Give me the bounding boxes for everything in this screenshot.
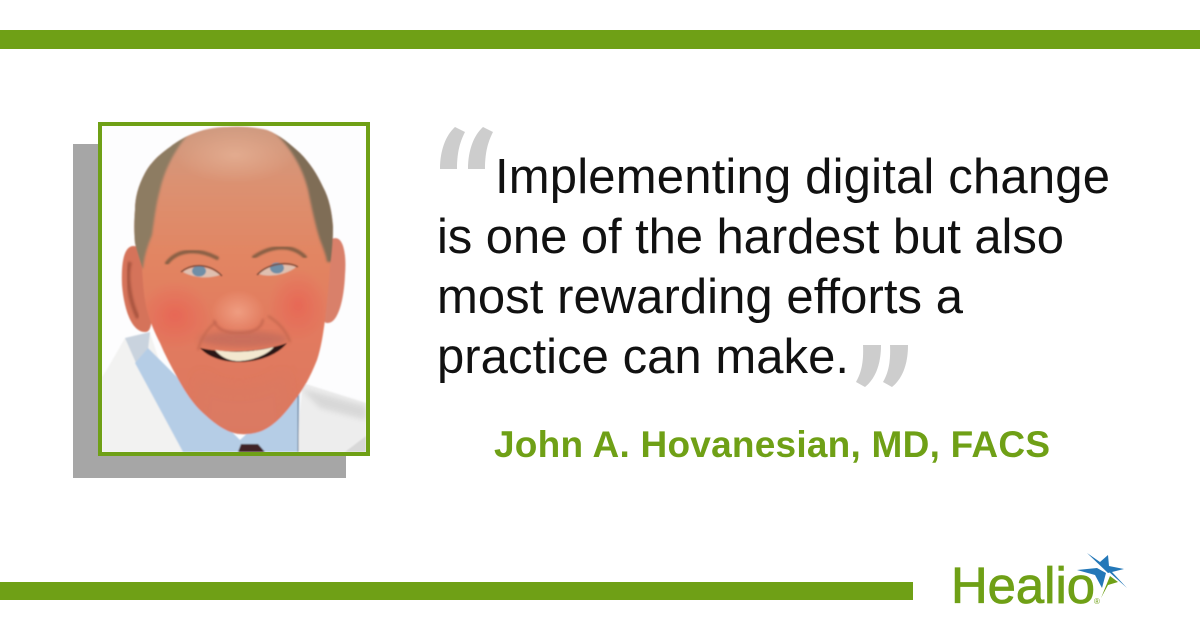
eyebrows [167,251,217,263]
gray offset shadow panel [73,144,346,478]
closing quotation mark [856,345,908,387]
top green bar [0,30,1200,49]
quote text: most rewarding efforts a [437,270,964,324]
Healio logo: ® [1094,597,1100,606]
jaw shade [195,372,290,440]
smile [200,343,287,362]
ears [122,238,345,332]
logo star [1077,553,1127,598]
tie knot [238,444,265,452]
nose [217,296,259,329]
hair [133,136,188,269]
smile creases [198,322,216,350]
eyes [183,267,220,277]
head [130,127,338,440]
quote text [437,150,1110,384]
scalp highlight [198,139,272,172]
bottom green bar [0,582,913,600]
upper lip shade [199,331,287,347]
cheeks [153,294,197,334]
blue shirt and collar [135,348,300,452]
opening quotation mark [440,127,493,169]
quote text: practice can make. [437,330,849,384]
quote text: Implementing digital change [495,150,1110,204]
portrait photo [98,122,370,456]
white coat [102,332,366,452]
Healio logo: Healio [951,557,1095,614]
attribution: John A. Hovanesian, MD, FACS [494,424,1050,465]
quote text: is one of the hardest but also [437,210,1064,264]
